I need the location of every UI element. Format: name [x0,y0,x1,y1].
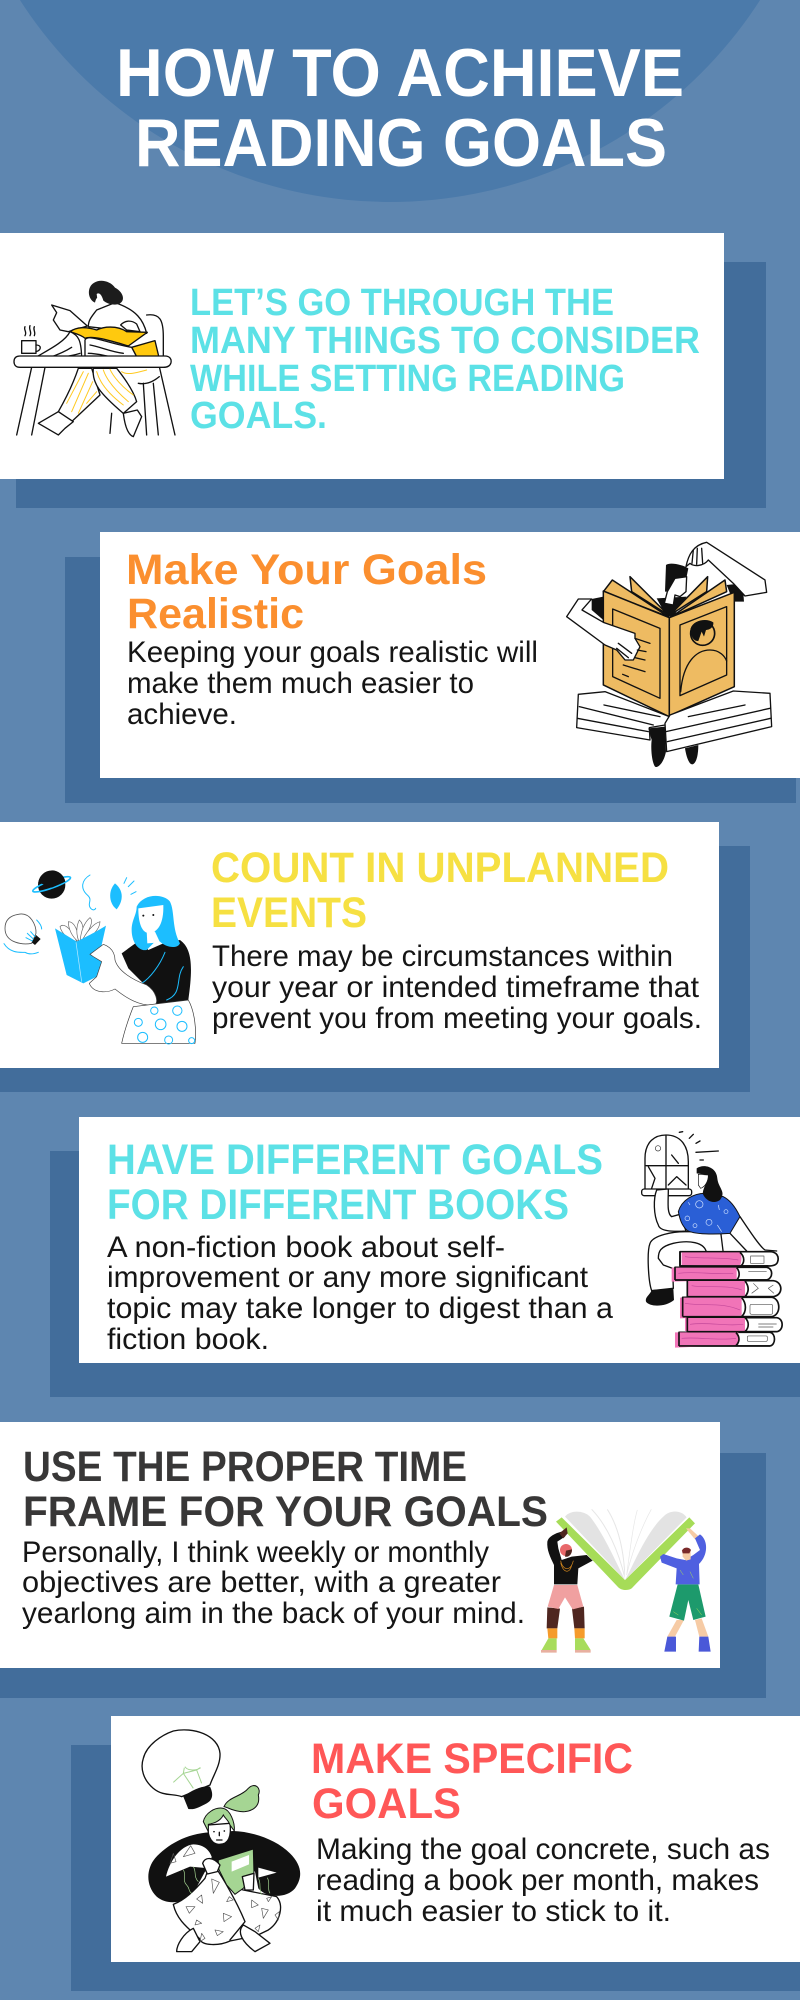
body text: fiction book. [107,1323,269,1356]
body text [107,1231,613,1356]
body text: make them much easier to [127,667,474,700]
icon: two people holding open book [541,1509,711,1653]
heading: FRAME FOR YOUR GOALS [23,1488,548,1536]
heading [311,1735,633,1828]
heading: GOALS [312,1780,461,1828]
title: READING GOALS [135,105,667,181]
title [116,35,684,181]
body text: achieve. [127,698,237,731]
panel: make your goals realistic [65,532,800,803]
panel shadow [0,846,750,1092]
panel card [79,1117,800,1363]
panel shadow [50,1151,800,1397]
body text: There may be circumstances within [212,940,673,973]
heading: COUNT IN UNPLANNED [211,844,669,892]
intro text: LET’S GO THROUGH THE [190,282,614,324]
panel: proper time frame [0,1422,766,1698]
body text: prevent you from meeting your goals. [212,1002,702,1035]
body text [22,1536,525,1630]
intro text: MANY THINGS TO CONSIDER [190,320,700,362]
heading: Realistic [127,590,304,638]
panel shadow [65,557,796,803]
intro text: GOALS. [190,395,327,437]
icon: person with lightbulb [142,1730,300,1952]
heading: MAKE SPECIFIC [311,1735,633,1783]
body text: your year or intended timeframe that [212,971,700,1004]
panel card [0,233,724,479]
body text [212,940,702,1035]
panel card [111,1716,800,1962]
heading: EVENTS [211,889,367,937]
panel card [0,1422,720,1668]
heading: HAVE DIFFERENT GOALS [107,1136,603,1184]
body text: reading a book per month, makes [316,1864,759,1897]
body text: yearlong aim in the back of your mind. [22,1597,525,1630]
icon: woman with blue book [4,870,196,1044]
panel shadow [16,262,766,508]
body text: Keeping your goals realistic will [127,636,538,669]
panel: intro [0,233,766,508]
panel shadow [0,1453,766,1698]
title: HOW TO ACHIEVE [116,35,684,111]
body text [127,636,538,731]
body text: topic may take longer to digest than a [107,1292,613,1325]
heading [126,546,487,638]
panel: different goals for different books [50,1117,800,1397]
icon: woman on stack of books [642,1132,782,1348]
body text: improvement or any more significant [107,1261,589,1294]
heading [107,1136,603,1229]
heading: Make Your Goals [126,546,487,594]
intro text: WHILE SETTING READING [190,358,625,400]
heading: USE THE PROPER TIME [23,1443,467,1491]
intro text [190,282,700,437]
body text: Personally, I think weekly or monthly [22,1536,489,1569]
panel card [0,822,719,1068]
panel: make specific goals [71,1716,800,1991]
icon: person behind open book [567,542,772,767]
body text: A non-fiction book about self- [107,1231,505,1264]
body text: objectives are better, with a greater [22,1566,501,1599]
body text [316,1833,770,1928]
body text: Making the goal concrete, such as [316,1833,770,1866]
heading [211,844,669,937]
panel: count in unplanned events [0,822,750,1092]
header circle [0,0,800,202]
icon: woman reading at table [14,281,175,437]
heading: FOR DIFFERENT BOOKS [107,1181,569,1229]
body text: it much easier to stick to it. [316,1895,671,1928]
panel card [100,532,800,778]
heading [23,1443,548,1536]
panel shadow [71,1745,800,1991]
